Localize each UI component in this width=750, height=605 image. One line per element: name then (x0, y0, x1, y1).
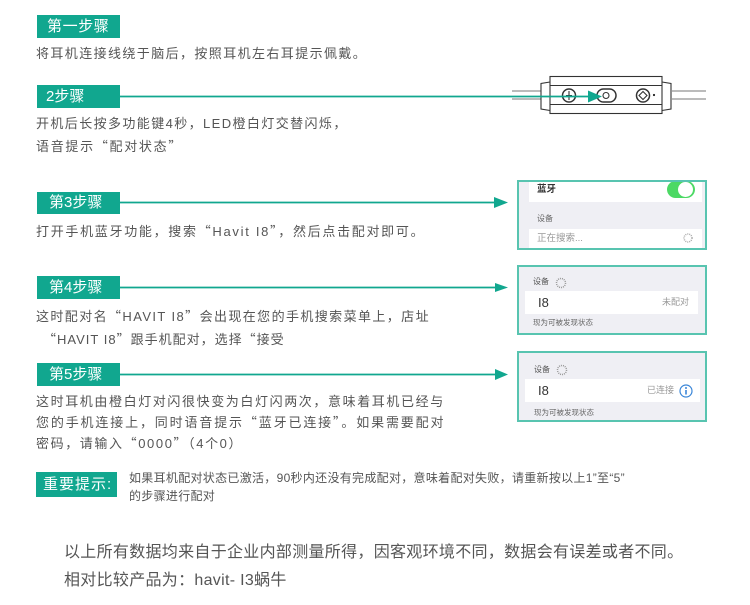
step 1 heading (37, 15, 120, 38)
bluetooth row: 蓝牙 (537, 184, 556, 195)
step 5 text: 您的手机连接上，同时语音提示“蓝牙已连接”。如果需要配对 (36, 412, 445, 431)
device row: I8 (538, 383, 549, 398)
step 4 heading: 第4步骤 (49, 279, 102, 296)
important notice text: 的步骤进行配对 (129, 489, 215, 503)
step 1 heading: 第一步骤 (47, 18, 109, 35)
icon: info (679, 384, 693, 398)
device row: 未配对 (662, 297, 689, 307)
step 1 text: 将耳机连接线绕于脑后，按照耳机左右耳提示佩戴。 (36, 46, 367, 61)
step 2 text: 开机后长按多功能键4秒，LED橙白灯交替闪烁， (36, 116, 348, 131)
arrow: step 3 to screenshot (120, 197, 508, 208)
icon: spinner (556, 364, 568, 376)
step 5 heading: 第5步骤 (49, 366, 102, 383)
bluetooth row (529, 182, 702, 202)
icon: headset remote control (512, 76, 706, 114)
devices label: 设备 (533, 277, 549, 286)
discoverable note: 现为可被发现状态 (533, 318, 593, 327)
arrow: step 5 to screenshot (120, 369, 508, 380)
searching row (529, 229, 702, 248)
important notice label: 重要提示: (43, 476, 112, 493)
step 5 text: 密码，请输入“0000”（4个0） (36, 433, 243, 452)
arrow: step 4 to screenshot (120, 283, 508, 292)
panel: bluetooth screenshot (517, 180, 707, 250)
step 5 text (36, 394, 445, 452)
panel: connected screenshot (517, 351, 707, 422)
step 2 heading: 2步骤 (46, 88, 84, 105)
device row (525, 291, 698, 314)
step 4 text (36, 306, 430, 348)
footer disclaimer: 相对比较产品为：havit- I3蜗牛 (64, 572, 287, 589)
footer disclaimer: 以上所有数据均来自于企业内部测量所得，因客观环境不同，数据会有误差或者不同。 (64, 544, 683, 561)
important notice text (129, 471, 625, 503)
panel: unpaired screenshot (517, 265, 707, 335)
discoverable note: 现为可被发现状态 (534, 408, 594, 417)
step 2 text: 语音提示“配对状态” (36, 136, 183, 155)
devices label: 设备 (534, 365, 550, 374)
arrow: step 2 to remote (120, 90, 602, 102)
step 4 text: 这时配对名“HAVIT I8”会出现在您的手机搜索菜单上，店址 (36, 306, 430, 325)
important notice label (36, 472, 117, 497)
step 2 text (36, 116, 348, 155)
step 3 heading: 第3步骤 (49, 194, 102, 211)
step 5 heading (37, 363, 120, 386)
device row: I8 (538, 295, 549, 310)
step 4 text: “HAVIT I8”跟手机配对，选择“接受 (43, 329, 285, 348)
step 4 heading (37, 276, 120, 299)
step 2 heading (37, 85, 120, 108)
step 3 text: 打开手机蓝牙功能，搜索“Havit I8”，然后点击配对即可。 (36, 221, 425, 240)
step 5 text: 这时耳机由橙白灯对闪很快变为白灯闪两次，意味着耳机已经与 (36, 394, 445, 409)
device row: 已连接 (647, 385, 674, 395)
step 3 heading (37, 192, 120, 214)
searching row: 正在搜索... (537, 233, 583, 244)
footer disclaimer (64, 543, 683, 589)
devices label: 设备 (537, 214, 553, 223)
device row (525, 379, 700, 402)
important notice text: 如果耳机配对状态已激活，90秒内还没有完成配对，意味着配对失败，请重新按以上1”至“5” (129, 471, 625, 485)
icon: spinner (556, 278, 566, 288)
